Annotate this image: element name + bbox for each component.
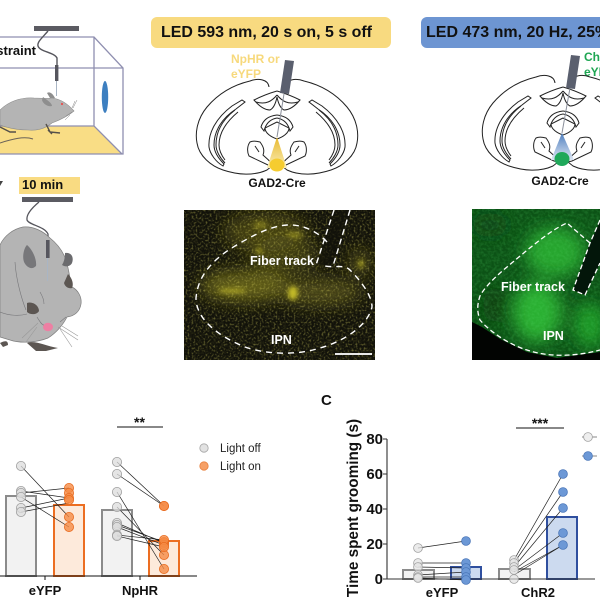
fiber track dark zone [573,222,600,295]
axes [383,439,595,579]
optic cable [38,31,57,66]
left hemisphere [196,79,277,174]
left hemisphere [482,75,563,170]
y axis tick labels: 0 [375,571,383,588]
mouse: grooming [0,227,81,351]
speckle [472,209,600,360]
legend markers [582,433,597,460]
brain diagram: ChR2 or eYFP [482,50,600,188]
off points [16,457,122,541]
significance bracket: *** [532,415,549,431]
header: LED 593 nm protocol [151,17,391,48]
virus label line 2: eYFP [231,67,261,81]
header: LED 473 nm protocol [421,17,600,48]
legend: Light on [220,461,261,473]
fiber holder [22,197,73,202]
duration tag [19,177,80,194]
mouse line label: GAD2-Cre [531,174,589,188]
bars: NpHR [102,510,179,576]
y axis tick labels: 80 [366,431,383,448]
panel C: grooming time bar chart [321,392,597,600]
panel: grooming mouse [0,177,81,351]
fiber track outline [573,220,600,295]
IPN outline [478,223,600,355]
ferrule [46,240,50,258]
cage frame [0,37,123,154]
y axis tick labels: 20 [366,536,383,553]
mouse line label: GAD2-Cre [248,176,306,190]
light cone [267,137,287,168]
bright spots [218,221,364,300]
fiber tip [46,258,48,281]
right hemisphere [277,79,358,174]
legend: Light off [220,443,262,455]
micrograph: yellow NpHR expression [184,210,375,360]
y axis tick labels: 60 [366,466,383,483]
significance bracket [516,415,564,431]
off points [414,544,518,583]
optic fiber shaft [277,94,284,137]
fiber holder [34,26,79,31]
optic cable [27,202,48,241]
label: NpHR: NpHR [122,583,159,598]
ferrule [55,65,58,81]
legend [200,443,262,473]
y axis title: Time spent grooming (s) [345,419,362,597]
label: eYFP: eYFP [426,585,459,600]
optic fiber [566,55,580,89]
label: IPN: IPN [271,333,292,347]
on points [64,483,169,574]
label: Fiber track: Fiber track [501,280,565,294]
black background below tissue [472,322,600,360]
fluorescence [472,213,600,347]
bars: eYFP [6,496,84,576]
micrograph: green ChR2 expression [472,209,600,360]
mouse: in cage [0,92,77,143]
optic fiber shaft [562,88,570,133]
clipped panel letter [0,181,3,186]
fiber track outline [316,210,350,266]
IPN outline [196,225,372,353]
duration text: 10 min [22,177,63,192]
fiber track shadow [317,210,350,266]
label: eYFP: eYFP [29,583,62,598]
header: LED 593 nm protocol: LED 593 nm, 20 s on, 5 s off [161,24,373,41]
panel B: bar chart, NpHR and eYFP [0,414,262,598]
significance bracket [117,414,163,430]
expression area [554,152,570,166]
light cone [551,133,574,160]
brain diagram: NpHR or eYFP [196,52,358,190]
fiber tip [56,81,58,96]
on points [462,470,567,584]
paired lines [418,474,563,580]
scale bar [335,353,372,355]
virus label: NpHR or [231,52,280,66]
x axis [0,576,197,580]
y axis tick labels: 40 [366,501,383,518]
speckle [184,210,375,360]
right hemisphere [563,75,600,170]
optic fiber [280,60,294,94]
cage floor [0,126,122,154]
fluorescence [200,212,372,306]
panel letter: C [321,392,332,409]
y axis tick labels [366,431,383,588]
paired lines [21,462,164,569]
significance bracket: ** [134,414,145,430]
label: IPN: IPN [543,329,564,343]
label: ChR2: ChR2 [521,585,555,600]
bars [403,517,577,579]
label: Fiber track: Fiber track [250,254,314,268]
expression area [270,158,284,172]
panel: restraint cage with mouse [0,26,123,154]
LED disc [102,81,108,113]
